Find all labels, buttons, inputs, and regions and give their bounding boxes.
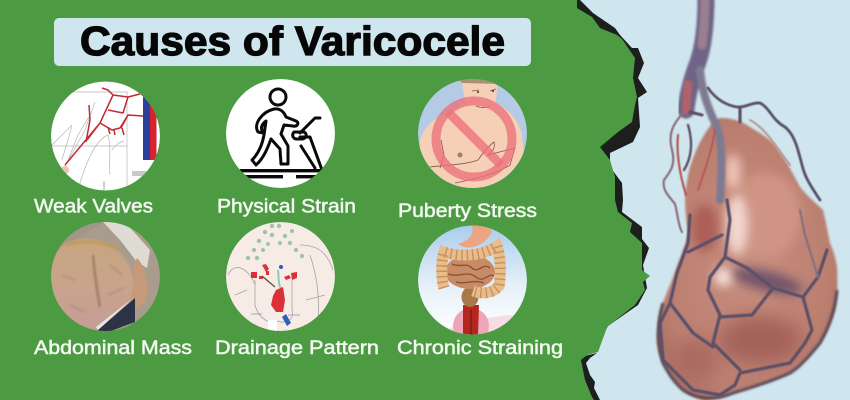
icon: chronic straining digestive tract	[418, 226, 527, 334]
green panel	[0, 0, 650, 400]
label: physical strain: Physical Strain	[217, 196, 356, 218]
lower torn edge shadow	[576, 353, 600, 400]
spermatic cord	[686, 0, 721, 200]
icon: puberty stress prohibited chest	[415, 79, 528, 195]
title: Causes of Varicocele	[80, 18, 505, 64]
label: abdominal mass: Abdominal Mass	[34, 337, 192, 359]
icon: drainage pattern diagram	[226, 222, 335, 331]
torn edge shadow	[570, 0, 649, 345]
testis body	[657, 118, 837, 400]
label: drainage pattern: Drainage Pattern	[215, 337, 379, 359]
icon: physical strain treadmill walker	[226, 79, 335, 188]
label: weak valves: Weak Valves	[34, 196, 153, 218]
illustration: varicocele testis with veins	[657, 0, 837, 400]
icon: weak valves vessel diagram	[50, 82, 160, 190]
label: puberty stress: Puberty Stress	[398, 200, 537, 222]
surface shading	[671, 154, 804, 382]
organ dark outline	[658, 290, 837, 398]
label: chronic straining: Chronic Straining	[397, 337, 563, 359]
veins	[660, 88, 827, 395]
icon: abdominal mass photo	[50, 222, 160, 335]
